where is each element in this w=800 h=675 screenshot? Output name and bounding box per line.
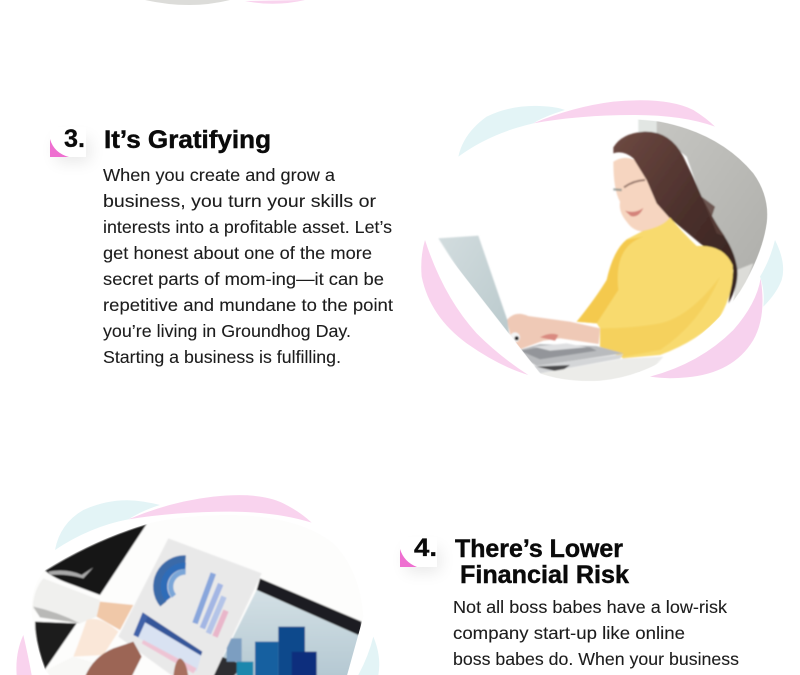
section 3 body text: repetitive and mundane to the point [103, 295, 393, 315]
donut chart [157, 559, 186, 604]
facial features [624, 180, 645, 187]
sweater [577, 217, 733, 358]
section 3 body text: get honest about one of the more [103, 243, 372, 263]
section 3 body text: business, you turn your skills or [103, 191, 376, 211]
watch [510, 332, 520, 342]
section 3 number badge [50, 125, 90, 162]
illustration: woman at laptop [421, 100, 783, 383]
section 4 heading [455, 535, 629, 589]
laptop with bar chart [257, 578, 362, 637]
hair [613, 132, 737, 303]
white shirt sleeve [33, 578, 100, 623]
section 4 number badge [400, 534, 440, 572]
report paper [118, 538, 262, 675]
section 3 body text: Starting a business is fulfilling. [103, 347, 341, 367]
section 4 heading: There’s Lower [455, 535, 623, 563]
face [613, 158, 672, 232]
section 3 body text: secret parts of mom-ing—it can be [103, 269, 384, 289]
section 4 number badge: 4. [414, 534, 437, 562]
desk [540, 357, 663, 383]
illustration: business charts [16, 495, 379, 675]
section 3 body text: When you create and grow a [103, 165, 335, 185]
previous section image remnant [145, 0, 305, 5]
section 4 body text: Not all boss babes have a low-risk [453, 597, 727, 617]
dark suit [45, 524, 147, 595]
section 3 number badge: 3. [64, 125, 85, 153]
keyboard and laptop base [513, 344, 623, 366]
photo [32, 524, 362, 675]
hand holding paper [85, 642, 142, 675]
hands [507, 314, 600, 349]
section 3 body text: interests into a profitable asset. Let’s [103, 217, 392, 237]
section 4 body text: company start-up like online [453, 623, 685, 643]
photo [438, 118, 773, 383]
section 4 body text: boss babes do. When your business [453, 649, 739, 669]
section 3 body text: you’re living in Groundhog Day. [103, 321, 351, 341]
section 3 body text [103, 165, 393, 367]
decorative swooshes around photo [421, 100, 783, 378]
paper table [138, 622, 201, 671]
section 3 heading: It’s Gratifying [104, 126, 271, 154]
hands [97, 602, 133, 630]
section 4 heading: Financial Risk [460, 561, 629, 589]
paper bar chart [195, 573, 226, 637]
section 4 body text [453, 597, 739, 669]
decorative swooshes around photo [16, 495, 379, 675]
laptop screen [438, 236, 512, 353]
